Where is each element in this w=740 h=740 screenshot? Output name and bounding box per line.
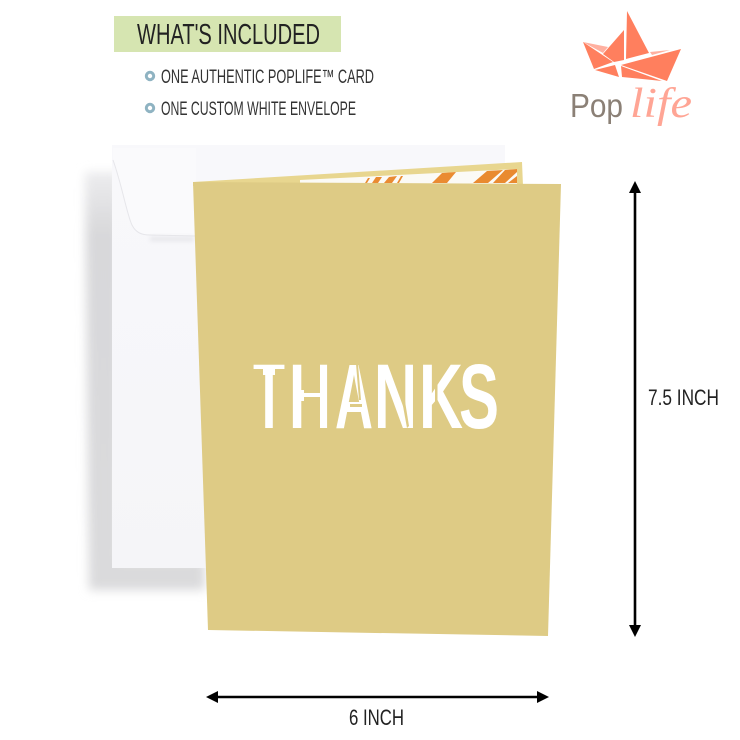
envelope with shadow [85,145,505,590]
width label: 6 INCH [349,705,404,730]
heading: what's included [114,16,341,52]
logo: poplife paper boat [570,11,692,127]
card title: thanks: H [289,346,331,448]
thanks stencil cut-lines [251,364,438,430]
logo: poplife paper boat: Pop [570,87,623,124]
heading: what's included: WHAT'S INCLUDED [137,19,320,51]
list: included items: ONE AUTHENTIC POPLIFE™ CARD [161,67,374,88]
card title: thanks: S [459,346,499,448]
card title: thanks: T [253,346,285,448]
list: included items [146,67,374,120]
card title: thanks: N [374,346,417,448]
height dimension arrow [629,181,641,637]
card front [193,182,561,636]
logo: poplife paper boat: life [630,81,692,127]
list: included items: ONE CUSTOM WHITE ENVELOPE [161,99,356,120]
card title: thanks [253,346,499,448]
card title: thanks: A [335,346,373,448]
height label: 7.5 INCH [648,385,719,410]
card back panel with striped interior [193,162,523,186]
card title: thanks: K [419,346,463,448]
width dimension arrow [206,691,549,703]
